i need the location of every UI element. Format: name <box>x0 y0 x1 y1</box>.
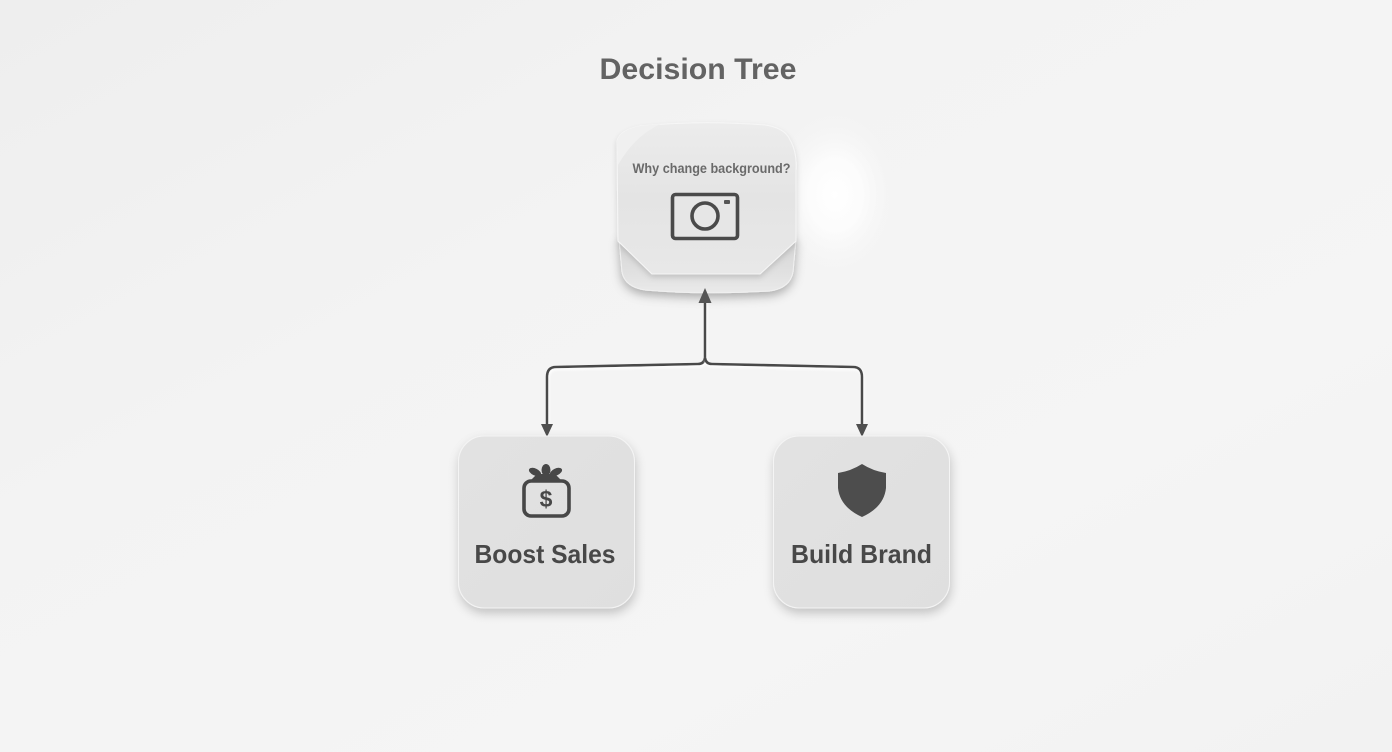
icon: shield <box>838 464 886 517</box>
card base <box>619 238 796 293</box>
arrow: to Boost Sales <box>541 358 705 437</box>
arrow: to Build Brand <box>705 358 868 437</box>
icon: money gift <box>524 464 569 516</box>
question text: Why change background? <box>632 161 790 176</box>
card face <box>617 123 796 274</box>
card <box>774 436 950 608</box>
card facet <box>617 124 661 165</box>
icon: camera <box>672 194 738 238</box>
highlight glow <box>773 113 897 277</box>
card <box>458 436 634 608</box>
title: Decision Tree <box>600 53 796 86</box>
label: Boost Sales <box>474 539 616 569</box>
connector arrows <box>541 288 868 437</box>
panel: root question <box>617 123 796 293</box>
panel: Build Brand <box>774 436 950 608</box>
panel: Boost Sales <box>458 436 634 608</box>
icon: money gift: $ <box>540 486 553 512</box>
arrow: to root <box>698 288 712 358</box>
label: Build Brand <box>791 539 932 569</box>
